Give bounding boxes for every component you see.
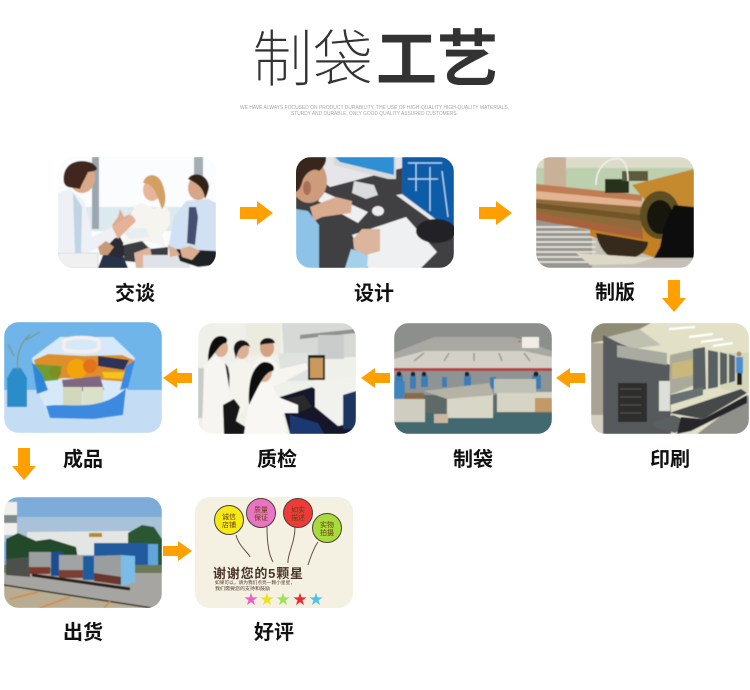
step labels: 制版 — [595, 281, 635, 304]
balloon labels: 实物 — [320, 520, 334, 529]
arrow: inspection to finished product — [163, 368, 192, 388]
subtitle text: STURDY AND DURABLE, ONLY GOOD QUALITY ASSURED CUSTOMERS. — [291, 111, 458, 117]
arrow: bag making to inspection — [361, 368, 390, 388]
photo: talk — [58, 157, 216, 268]
photo: design — [290, 157, 456, 268]
step labels: 质检 — [257, 447, 297, 471]
small note — [215, 580, 292, 591]
balloon labels: 质量 — [254, 505, 268, 514]
photo: finished product — [4, 322, 162, 433]
balloon labels: 保证 — [254, 513, 268, 522]
rating stars: ★ — [292, 590, 308, 610]
arrow: design to plate making — [479, 201, 512, 225]
balloon labels: 如实 — [291, 505, 305, 514]
title — [252, 26, 498, 95]
rating stars: ★ — [308, 590, 324, 610]
step labels: 出货 — [63, 620, 103, 644]
arrow: printing to bag making — [556, 368, 585, 388]
thanks text: 谢谢您的5颗星 — [213, 566, 303, 581]
small note: 如果可以，请为我们点亮一颗小星星， — [215, 579, 295, 586]
rating stars: ★ — [275, 590, 291, 610]
balloon labels: 诚信 — [222, 512, 236, 521]
balloon labels: 描述 — [291, 513, 305, 522]
step labels: 交谈 — [115, 281, 155, 305]
balloon labels: 拍摄 — [320, 528, 334, 537]
subtitle text: WE HAVE ALWAYS FOCUSED ON PRODUCT DURABILITY, THE USE OF HIGH-QUALITY HIGH-QUALITY MATERIALS, — [240, 105, 509, 111]
step labels: 好评 — [254, 621, 294, 644]
arrow: finished product to shipping — [12, 448, 36, 480]
photo: plate making — [536, 157, 694, 268]
arrow: plate making to printing — [662, 280, 686, 312]
step labels: 设计 — [354, 282, 394, 305]
balloon strings — [236, 527, 318, 565]
balloons — [214, 498, 342, 542]
title: 工艺 — [376, 26, 498, 95]
step labels: 印刷 — [650, 448, 690, 471]
photo: bag making — [394, 323, 552, 434]
rating stars: ★ — [243, 590, 259, 610]
subtitle text — [240, 105, 509, 117]
rating stars: ★ — [259, 590, 275, 610]
step labels: 制袋 — [453, 448, 493, 471]
balloon labels: 店铺 — [222, 520, 236, 529]
photo: inspection — [198, 323, 356, 434]
step labels: 成品 — [63, 447, 103, 471]
photo: printing — [591, 323, 749, 434]
rating stars — [244, 592, 322, 605]
photo: shipping — [4, 497, 162, 608]
balloon labels — [222, 505, 334, 537]
step labels — [63, 281, 690, 644]
title: 制袋 — [252, 26, 373, 95]
arrow: talk to design — [240, 201, 273, 225]
panel: review — [195, 497, 353, 610]
small note: 我们需要您的支持和鼓励 — [215, 585, 271, 592]
arrow: shipping to review — [163, 541, 192, 561]
